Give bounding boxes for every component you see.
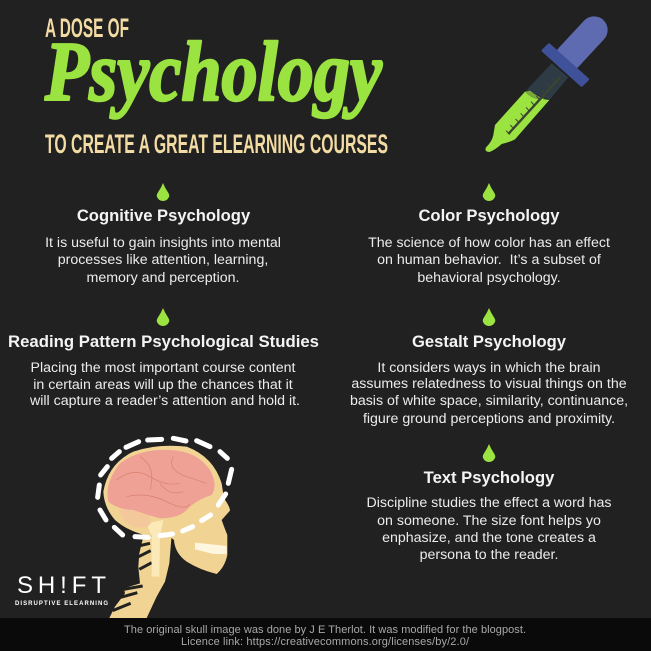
- icon: drop gestalt: [483, 308, 495, 326]
- logo: shift: DISRUPTIVE ELEARNING: [15, 601, 108, 607]
- heading: color psychology: Color Psychology: [418, 206, 560, 225]
- teeth: [195, 543, 227, 554]
- logo: shift: SH!FT: [17, 572, 106, 599]
- text: text psychology: enphasize, and the tone creates a: [382, 530, 596, 546]
- text: color: on human behavior. It’s a subset of: [377, 252, 601, 268]
- icon: drop color: [483, 183, 495, 201]
- text: color: The science of how color has an effect: [368, 235, 610, 251]
- text: gestalt: assumes relatedness to visual things on the: [351, 376, 627, 392]
- brain: [107, 450, 215, 518]
- icon: drop reading: [157, 308, 169, 326]
- heading: gestalt: Gestalt Psychology: [412, 332, 567, 351]
- text: gestalt: It considers ways in which the brain: [377, 360, 601, 376]
- text: text psychology: persona to the reader.: [420, 547, 558, 563]
- heading: cognitive psychology: Cognitive Psychology: [77, 206, 251, 225]
- title: psychology: Psychology: [44, 25, 382, 119]
- text: text psychology: Discipline studies the effect a word has: [366, 495, 612, 511]
- text: gestalt: figure ground perceptions and proximity.: [363, 411, 615, 427]
- text: reading: Placing the most important course content: [31, 360, 296, 376]
- subtitle: TO CREATE A GREAT ELEARNING COURSES: [45, 129, 388, 159]
- heading: text psychology: Text Psychology: [424, 468, 555, 487]
- text: cognitive: memory and perception.: [86, 270, 240, 286]
- footer: Licence link: https://creativecommons.org/licenses/by/2.0/: [181, 636, 470, 648]
- heading: reading pattern: Reading Pattern Psychological Studies: [8, 332, 319, 351]
- title: a dose of: A DOSE OF: [45, 13, 129, 43]
- spine: [109, 535, 172, 618]
- text: color: behavioral psychology.: [417, 270, 561, 286]
- footer: [0, 618, 651, 651]
- icon: drop cognitive: [157, 183, 169, 201]
- text: reading: in certain areas will up the chances that it: [33, 377, 293, 393]
- text: cognitive: processes like attention, learning,: [58, 252, 268, 268]
- text: gestalt: basis of white space, similarity, continuance,: [350, 393, 628, 409]
- text: text psychology: on someone. The size font helps yo: [377, 513, 601, 529]
- text: cognitive: It is useful to gain insights into mental: [45, 235, 281, 251]
- icon: dropper: [485, 30, 594, 152]
- illustration: skull: [98, 438, 232, 618]
- cranium: [103, 446, 230, 574]
- icon: drop text: [483, 444, 495, 462]
- dashed outline: [98, 438, 232, 537]
- spinal cord: [147, 520, 163, 577]
- footer: The original skull image was done by J E Therlot. It was modified for the blogpost.: [124, 624, 526, 636]
- text: reading: will capture a reader’s attention and hold it.: [29, 393, 300, 409]
- cerebellum: [118, 508, 151, 528]
